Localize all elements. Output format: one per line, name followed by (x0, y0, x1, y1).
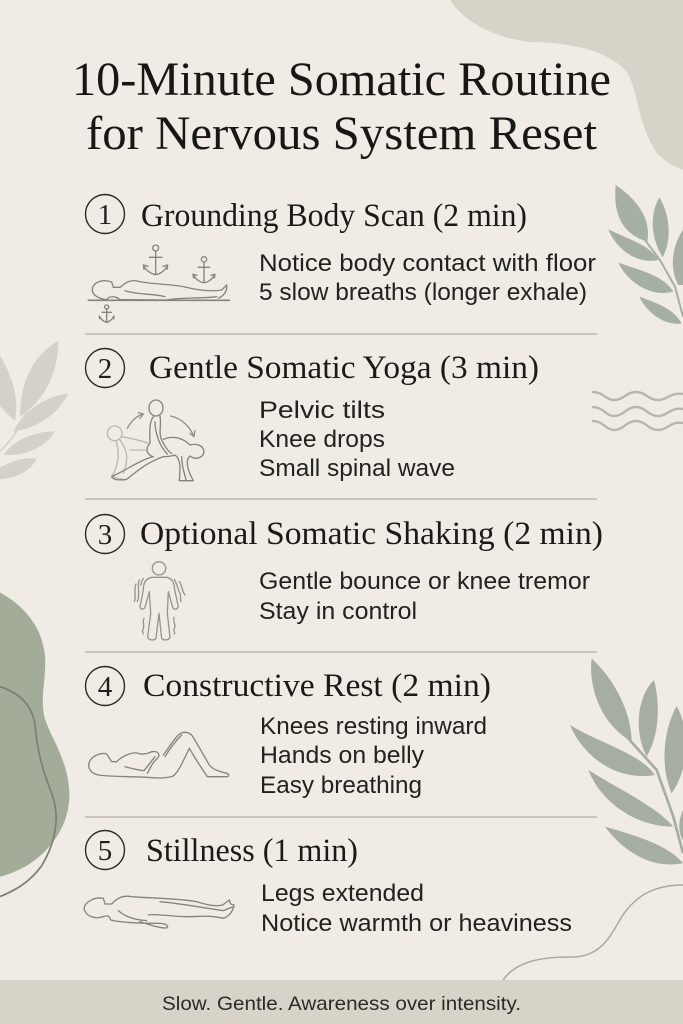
heading: step 1: Grounding Body Scan (2 min) (141, 198, 527, 234)
text: step 2: Small spinal wave (259, 455, 455, 482)
number 2 (86, 348, 124, 388)
number 5 (86, 830, 124, 870)
heading: step 5: Stillness (1 min) (146, 833, 358, 869)
text: step 1: Notice body contact with floor (259, 250, 596, 277)
decorative leaves: left (0, 341, 68, 479)
icon: body lying with anchors (88, 245, 229, 322)
text: step 4: Knees resting inward (260, 713, 487, 740)
title (72, 54, 611, 160)
text: step 4: Easy breathing (260, 772, 422, 799)
text: step 3 (259, 568, 590, 625)
text: step 4 (260, 713, 487, 799)
number 4 (86, 666, 124, 706)
text: step 2 (259, 397, 455, 482)
decorative blob: green left (0, 592, 69, 897)
decorative blob: top right (450, 0, 683, 170)
text: step 2: Pelvic tilts (259, 397, 385, 424)
panel: step 3 (86, 514, 603, 640)
panel: step 4 (86, 666, 491, 799)
number 3 (86, 514, 124, 554)
heading: step 3: Optional Somatic Shaking (2 min) (140, 516, 603, 552)
decorative curve: bottom right (503, 885, 683, 980)
text: step 5: Notice warmth or heaviness (261, 910, 572, 937)
number 1 (86, 194, 124, 234)
decorative leaves: top right (608, 185, 683, 324)
heading: step 4: Constructive Rest (2 min) (143, 668, 491, 704)
panel: step 5 (84, 830, 572, 937)
icon: lying still figure (84, 896, 234, 928)
text: step 1: 5 slow breaths (longer exhale) (259, 279, 587, 306)
text: step 3: Stay in control (259, 598, 417, 625)
decorative waves: right (593, 392, 683, 430)
number 4: 4 (98, 671, 113, 703)
text: step 3: Gentle bounce or knee tremor (259, 568, 590, 595)
text: step 1 (259, 250, 596, 306)
decorative leaves: bottom right (570, 658, 683, 864)
title: 10-Minute Somatic Routine (72, 54, 611, 106)
heading: step 2: Gentle Somatic Yoga (3 min) (149, 350, 539, 386)
icon: constructive rest figure (89, 732, 229, 778)
text: step 5: Legs extended (261, 880, 424, 907)
number 3: 3 (98, 519, 112, 551)
number 1: 1 (98, 199, 112, 231)
number 5: 5 (98, 835, 112, 867)
icon: standing figure shaking (134, 562, 185, 640)
text: step 4: Hands on belly (260, 742, 425, 769)
icon: yoga figures with arrows (107, 400, 204, 481)
text: step 2: Knee drops (259, 426, 385, 453)
panel: step 2 (86, 348, 539, 482)
text: step 5 (261, 880, 572, 937)
number 2: 2 (98, 353, 112, 385)
title: for Nervous System Reset (86, 108, 597, 160)
footer banner: Slow. Gentle. Awareness over intensity. (162, 993, 521, 1015)
panel: step 1 (86, 194, 596, 322)
footer banner (0, 980, 683, 1024)
